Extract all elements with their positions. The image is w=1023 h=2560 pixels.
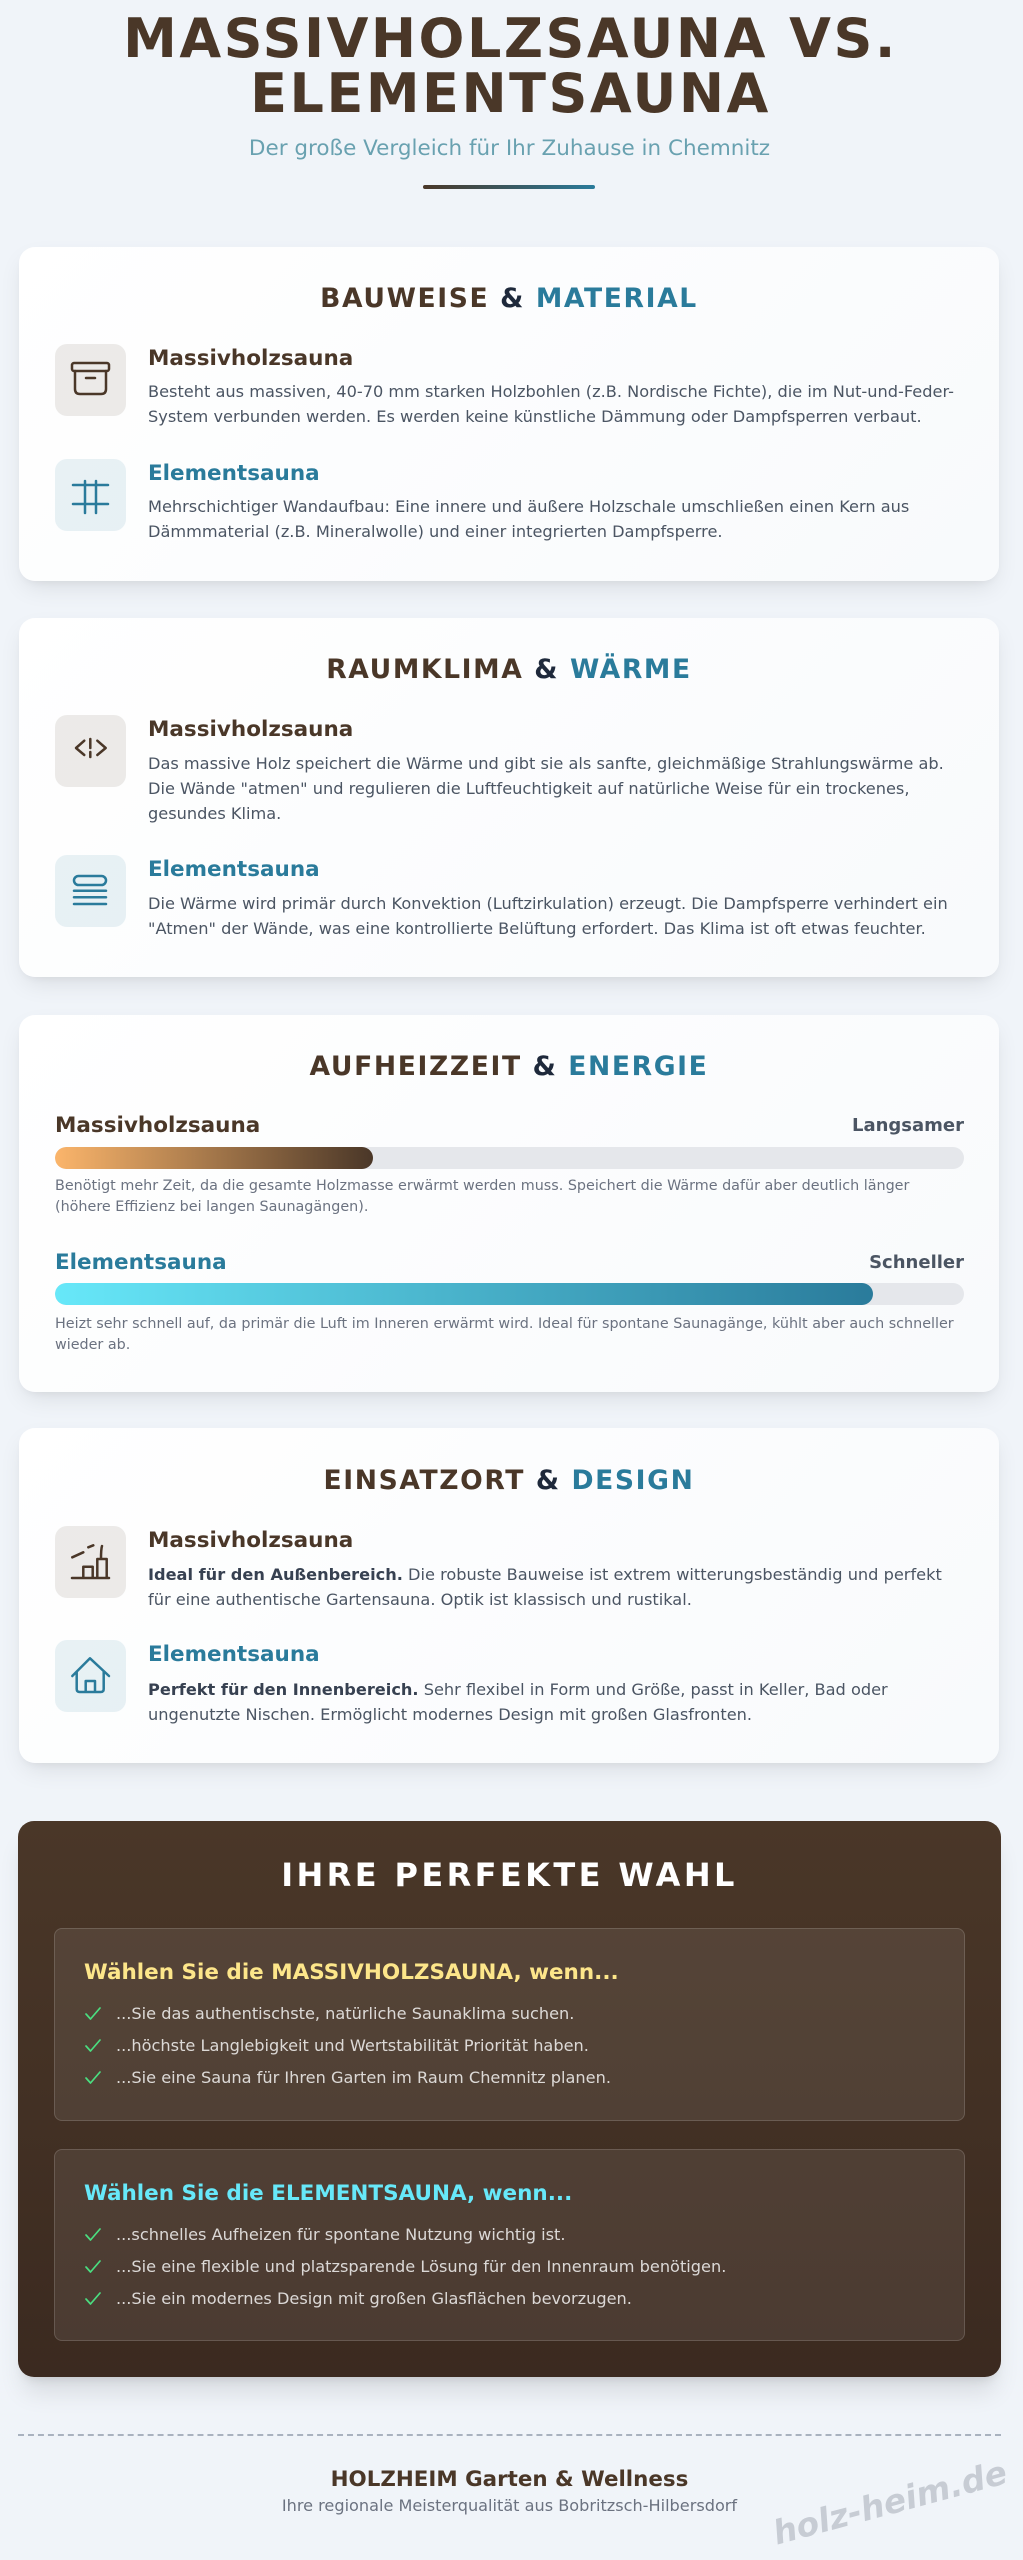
title: MASSIVHOLZSAUNA VS. — [123, 7, 898, 70]
text: Massivholzsauna location: Ideal für den Außenbereich. Die robuste Bauweise ist extrem witterungsbeständig und perfekt — [148, 1564, 942, 1584]
list item: ...Sie das authentischste, natürliche Saunaklima suchen. — [116, 2004, 574, 2023]
heading: Massivholzsauna: Massivholzsauna — [148, 346, 353, 371]
heading: Massivholzsauna: Massivholzsauna — [148, 1528, 353, 1552]
footer company name: HOLZHEIM Garten & Wellness — [331, 2466, 688, 2492]
list item: ...Sie eine flexible und platzsparende Lösung für den Innenraum benötigen. — [116, 2257, 726, 2276]
text: Massivholzsauna construction: System verbunden werden. Es werden keine künstliche Dämmung oder Dampfsperren verbaut. — [148, 406, 922, 426]
list item: ...höchste Langlebigkeit und Wertstabilität Priorität haben. — [116, 2036, 589, 2055]
heading: Elementsauna choice: Wählen Sie die ELEMENTSAUNA, wenn... — [84, 2181, 572, 2206]
text: Massivholzsauna location: für eine authentische Gartensauna. Optik ist klassisch und rustikal. — [148, 1590, 692, 1608]
text: Elementsauna location — [148, 1680, 888, 1724]
heading: Raumklima & Wärme: RAUMKLIMA & WÄRME — [326, 654, 692, 685]
text: Elementsauna construction: Dämmmaterial (z.B. Mineralwolle) und einer integrierten Dampfsperre. — [148, 522, 723, 541]
panel: Bauweise & Material — [19, 247, 999, 580]
row: Massivholzsauna construction — [55, 344, 954, 426]
heading: Massivholzsauna: Massivholzsauna — [148, 717, 353, 742]
heading: Bauweise & Material: BAUWEISE & MATERIAL — [320, 283, 698, 314]
heading: Elementsauna: Elementsauna — [148, 857, 320, 882]
icon: layered grid — [55, 458, 126, 530]
callout: choose Massivholzsauna — [54, 1928, 965, 2121]
row: Elementsauna location — [55, 1640, 888, 1724]
list item: ...Sie ein modernes Design mit großen Glasflächen bevorzugen. — [116, 2289, 632, 2308]
label: Langsamer: Langsamer — [852, 1115, 964, 1136]
row: Elementsauna climate — [55, 855, 948, 938]
panel: Einsatzort & Design — [19, 1428, 999, 1763]
text: Massivholzsauna climate: Die Wände "atmen" und regulieren die Luftfeuchtigkeit auf natürliche Weise für ein trockenes, — [148, 779, 909, 798]
row: Massivholzsauna location — [55, 1526, 942, 1608]
callout: choose Elementsauna — [54, 2149, 965, 2341]
text: Massivholzsauna construction — [148, 382, 954, 426]
icon: radiating heat — [55, 715, 126, 787]
text: Massivholzsauna climate: gesundes Klima. — [148, 804, 281, 823]
text: Elementsauna location: Perfekt für den Innenbereich. Sehr flexibel in Form und Größe, passt in Keller, Bad oder — [148, 1680, 888, 1698]
text: Elementsauna heating: Heizt sehr schnell auf, da primär die Luft im Inneren erwärmt wird. Ideal für spontane Saunagänge, kühlt aber auch schneller — [55, 1316, 954, 1332]
icon: layered lines — [55, 855, 126, 927]
heading: Einsatzort & Design: EINSATZORT & DESIGN — [324, 1464, 694, 1496]
text: Elementsauna climate: Die Wärme wird primär durch Konvektion (Luftzirkulation) erzeugt. Die Dampfsperre verhindert ein — [148, 894, 948, 912]
row: Massivholzsauna climate — [55, 715, 944, 823]
bar chart: Elementsauna heating speed 90% — [55, 1283, 964, 1305]
text: Elementsauna climate: "Atmen" der Wände, was eine kontrollierte Belüftung erfordert. Das Klima ist oft etwas feuchter. — [148, 918, 926, 938]
heading: Ihre perfekte Wahl: IHRE PERFEKTE WAHL — [281, 1856, 738, 1894]
footer tagline: Ihre regionale Meisterqualität aus Bobritzsch-Hilbersdorf — [282, 2496, 737, 2515]
label: Massivholzsauna: Massivholzsauna — [55, 1113, 260, 1138]
title — [123, 7, 898, 125]
label: Elementsauna: Elementsauna — [55, 1250, 227, 1275]
title divider — [423, 185, 595, 188]
text: Massivholzsauna heating — [55, 1178, 910, 1215]
text: Massivholzsauna climate: Das massive Holz speichert die Wärme und gibt sie als sanfte, gleichmäßige Strahlungswärme ab. — [148, 754, 944, 773]
heading: Elementsauna: Elementsauna — [148, 460, 320, 486]
heading: Aufheizzeit & Energie: AUFHEIZZEIT & ENERGIE — [310, 1051, 708, 1082]
panel: Aufheizzeit & Energie — [19, 1014, 999, 1392]
text: Elementsauna construction — [148, 497, 909, 541]
title: ELEMENTSAUNA — [250, 62, 771, 125]
text: Elementsauna location: ungenutzte Nischen. Ermöglicht modernes Design mit großen Glasfronten. — [148, 1704, 752, 1724]
text: Massivholzsauna location — [148, 1564, 942, 1608]
text: Massivholzsauna construction: Besteht aus massiven, 40-70 mm starken Holzbohlen (z.B. Nordische Fichte), die im Nut-und-Feder- — [148, 382, 954, 400]
text: Elementsauna climate — [148, 894, 948, 938]
watermark: holz-heim.de — [769, 2453, 1011, 2552]
text: Elementsauna construction: Mehrschichtiger Wandaufbau: Eine innere und äußere Holzschale umschließen einen Kern aus — [148, 497, 909, 516]
text: Massivholzsauna heating: Benötigt mehr Zeit, da die gesamte Holzmasse erwärmt werden muss. Speichert die Wärme dafür aber deutlich länger — [55, 1178, 909, 1194]
list item: ...Sie eine Sauna für Ihren Garten im Raum Chemnitz planen. — [116, 2068, 611, 2087]
icon: house — [55, 1640, 126, 1712]
heading: Elementsauna: Elementsauna — [148, 1642, 320, 1667]
heading: Massivholzsauna choice: Wählen Sie die MASSIVHOLZSAUNA, wenn... — [84, 1960, 619, 1985]
icon: outdoor cabin with chimney — [55, 1526, 126, 1598]
subtitle: Der große Vergleich für Ihr Zuhause in Chemnitz — [249, 136, 770, 161]
text: Massivholzsauna heating: (höhere Effizienz bei langen Saunagängen). — [55, 1199, 368, 1215]
bar chart: Massivholzsauna heating speed 35% — [55, 1147, 964, 1169]
panel: Raumklima & Wärme — [19, 618, 999, 977]
icon: archive box — [55, 344, 126, 416]
text: Elementsauna heating — [55, 1316, 954, 1353]
text: Massivholzsauna climate — [148, 754, 944, 823]
row: Elementsauna construction — [55, 459, 909, 541]
text: Elementsauna heating: wieder ab. — [55, 1337, 130, 1353]
list item: ...schnelles Aufheizen für spontane Nutzung wichtig ist. — [116, 2225, 566, 2244]
panel: Ihre perfekte Wahl — [18, 1821, 1001, 2377]
label: Schneller: Schneller — [869, 1252, 964, 1272]
